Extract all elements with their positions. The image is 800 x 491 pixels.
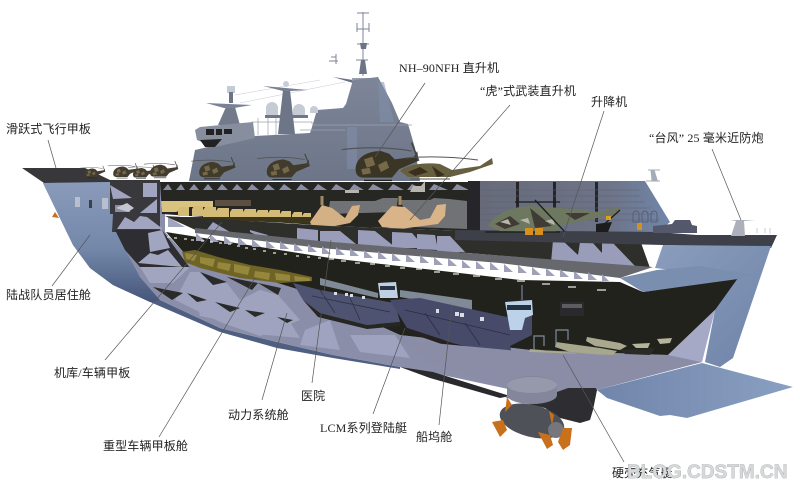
upper hangar: dark interior (160, 182, 468, 231)
helicopter: mid deck 2 (257, 154, 310, 179)
label: elevator: 升降机 (591, 95, 627, 109)
gussets under hangar deck (205, 222, 635, 268)
label: rigid inflatable boats: 硬壳充气艇 (612, 465, 673, 480)
flight deck (22, 168, 160, 184)
bow compartments: light gussets (110, 183, 190, 283)
vehicles in hangar (161, 200, 312, 224)
skeg (505, 380, 597, 423)
keel strip (400, 367, 510, 398)
helicopter row: bow (80, 161, 178, 178)
right lavender wall (668, 310, 715, 362)
island superstructure (189, 77, 420, 181)
stern ramp (597, 363, 793, 418)
label: propulsion compartment: 动力系统舱 (228, 408, 289, 422)
label: marine quarters: 陆战队员居住舱 (6, 287, 91, 302)
bow compartments: dark cells (110, 182, 190, 268)
label: hospital: 医院 (301, 389, 325, 403)
label: Typhoon 25mm CIWS: “台风” 25 毫米近防炮 (649, 130, 764, 145)
label: heavy vehicle deck: 重型车辆甲板舱 (103, 438, 188, 453)
helicopter: mid deck 1 (191, 157, 235, 179)
hull: bow outer side (22, 168, 400, 369)
azimuth pod turntable (507, 376, 557, 404)
Typhoon 25mm gun (730, 220, 770, 236)
dock floor highlight (400, 340, 702, 388)
landing craft 2 (390, 285, 584, 362)
hull: right stern side (655, 245, 771, 367)
stern deck (455, 230, 777, 248)
mast: centre radar mast with domes (258, 81, 345, 135)
sponson (620, 266, 753, 292)
label: Tiger attack helicopter: “虎”式武装直升机 (480, 84, 576, 98)
label: LCM landing craft: LCM系列登陆艇 (320, 420, 407, 435)
deck equipment (653, 220, 697, 233)
inflatable boats (528, 330, 672, 378)
aft radar (646, 170, 660, 181)
helicopter: green Tiger in hangar (485, 200, 620, 232)
label: NH-90NFH helicopter: NH–90NFH 直升机 (399, 61, 499, 75)
watermark: BLOG.CDSTM.CN (627, 462, 787, 483)
deck beams (163, 184, 469, 190)
leader lines (48, 83, 741, 462)
lower vehicle bay dark interior (166, 232, 743, 355)
label: hangar and vehicle deck: 机库/车辆甲板 (54, 365, 130, 380)
helicopter: Tiger on deck (400, 157, 493, 179)
heavy vehicles (tanks) (182, 250, 312, 283)
bay ceiling lights (167, 237, 606, 290)
mast: forward main mast with antennas (235, 12, 376, 103)
beam triangles row (196, 233, 609, 281)
label: ski-jump flight deck: 滑跃式飞行甲板 (6, 122, 91, 136)
dock back wall (320, 278, 472, 310)
aft hangar wall (468, 181, 670, 233)
label: well dock: 船坞舱 (416, 429, 452, 444)
life raft canisters (525, 223, 642, 235)
gray beam strip over lower bay (195, 228, 653, 278)
propulsion pods (492, 397, 572, 450)
hangar deck beam strip (165, 216, 650, 268)
landing craft 1 (293, 282, 400, 329)
mast: bridge and radar mast (195, 86, 255, 147)
helicopters in hangar: grey and tan (310, 181, 467, 229)
helicopter: NH-90NFH (342, 143, 419, 180)
lower hull: machinery compartments (153, 272, 410, 358)
lower hull cut section (110, 182, 702, 400)
